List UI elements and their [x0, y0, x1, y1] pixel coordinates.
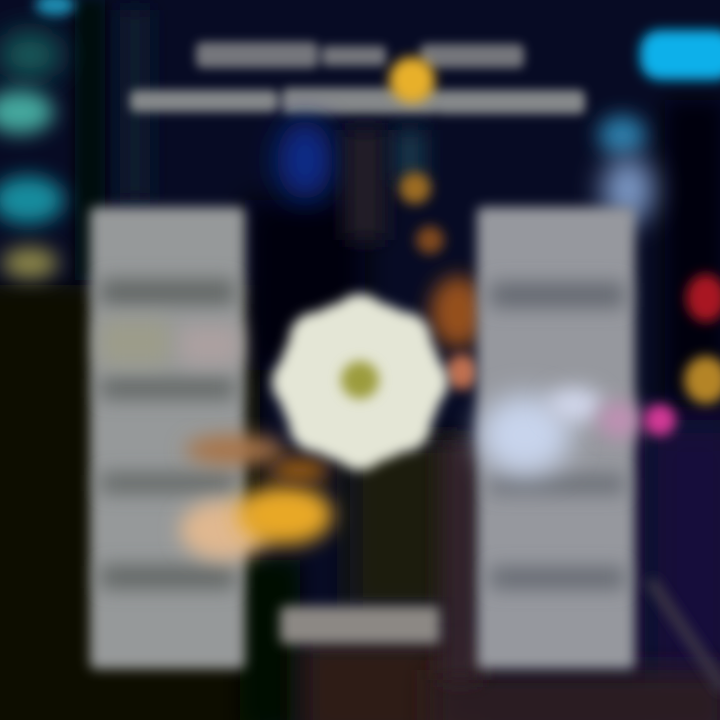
flame glow	[180, 435, 333, 560]
title line one	[196, 42, 524, 68]
panel: left column	[90, 207, 245, 669]
top right glow	[598, 30, 720, 224]
right light glow	[479, 387, 676, 475]
title	[130, 42, 585, 114]
icon: title sun	[389, 57, 435, 103]
flower centre	[341, 361, 379, 399]
panel: bottom centre	[280, 606, 440, 644]
left edge decorative glows	[0, 0, 75, 279]
right edge indicators	[684, 274, 720, 404]
flower petals	[272, 294, 448, 470]
left column tints	[100, 320, 240, 365]
right column rows	[490, 283, 625, 588]
central decorative glows	[277, 120, 486, 390]
panel: right column	[477, 207, 635, 669]
left column rows	[100, 280, 235, 588]
icon: central flower	[272, 294, 448, 470]
title line two	[130, 88, 585, 114]
